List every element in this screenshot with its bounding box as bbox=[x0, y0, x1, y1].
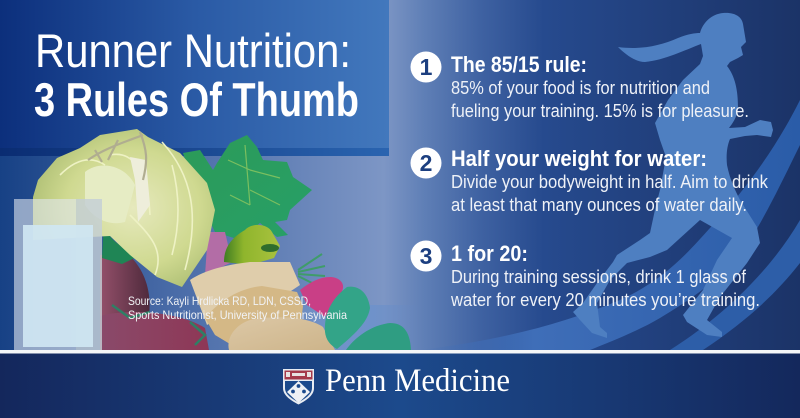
turnip purple bbox=[205, 232, 232, 275]
leafy greens bbox=[183, 135, 312, 240]
vegetables illustration bbox=[33, 129, 411, 350]
rule 2: Divide your bodyweight in half. Aim to drink bbox=[451, 171, 769, 192]
title bbox=[34, 24, 359, 126]
carrot top bbox=[298, 254, 325, 286]
glass of water bbox=[14, 199, 102, 350]
rule 1: 85% of your food is for nutrition and bbox=[451, 77, 710, 98]
title: Runner Nutrition: bbox=[35, 24, 351, 77]
rule 1: 1 bbox=[420, 54, 433, 80]
rule 1 bbox=[410, 52, 749, 121]
rule 3: 3 bbox=[420, 243, 432, 269]
swoosh arcs bbox=[420, 100, 800, 350]
rule 2: 2 bbox=[420, 150, 432, 176]
front potato bbox=[228, 317, 335, 350]
tomato bbox=[100, 312, 209, 350]
logo wordmark: Penn Medicine bbox=[325, 363, 510, 399]
rule 1: The 85/15 rule: bbox=[451, 52, 587, 77]
source credit: Sports Nutritionist, University of Pennsylvania bbox=[128, 308, 347, 322]
parsnip bbox=[190, 262, 300, 325]
back potato bbox=[205, 286, 303, 350]
source credit bbox=[128, 294, 347, 322]
radish bbox=[300, 277, 343, 317]
rule 3: 1 for 20: bbox=[451, 241, 528, 266]
rule 3: During training sessions, drink 1 glass of bbox=[451, 266, 747, 287]
green pepper bbox=[224, 225, 280, 265]
footer band bbox=[0, 350, 800, 418]
title panel bbox=[0, 0, 389, 156]
rule 3 bbox=[410, 240, 760, 310]
spinach bbox=[325, 287, 370, 349]
rule 2: Half your weight for water: bbox=[451, 146, 707, 171]
rule 2: at least that many ounces of water daily. bbox=[451, 194, 747, 215]
rule 2 bbox=[410, 146, 769, 215]
rule 1: fueling your training. 15% is for pleasure. bbox=[451, 100, 749, 121]
source credit: Source: Kayli Hrdlicka RD, LDN, CSSD, bbox=[128, 294, 311, 308]
runner silhouette bbox=[573, 13, 773, 338]
title: 3 Rules Of Thumb bbox=[34, 73, 359, 126]
cabbage bbox=[33, 129, 215, 287]
lower lighter band bbox=[250, 305, 420, 350]
rule 3: water for every 20 minutes you’re training. bbox=[450, 289, 760, 310]
icon: Penn shield logo bbox=[283, 369, 314, 404]
eggplant bbox=[100, 255, 150, 325]
